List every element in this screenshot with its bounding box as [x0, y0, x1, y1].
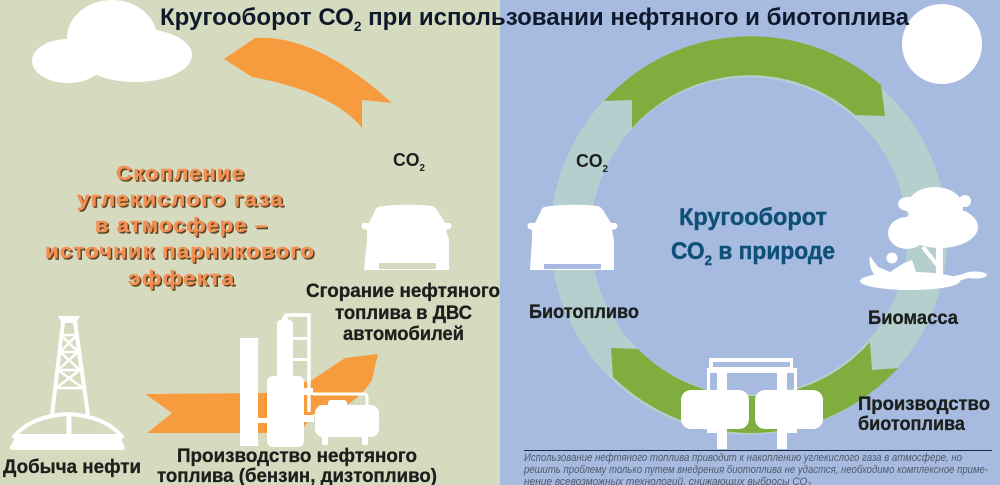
label: biofuel production — [858, 393, 990, 435]
icon: tree biomass — [860, 187, 987, 290]
label: biomass: Биомасса — [868, 307, 958, 329]
arrow: orange production to car — [145, 354, 378, 433]
icon: biofuel plant — [681, 358, 823, 449]
heading: greenhouse effect callout: источник парникового — [45, 240, 315, 263]
heading: greenhouse effect callout: эффекта — [130, 268, 236, 292]
icon: car right — [528, 205, 618, 270]
label: CO2 left: CO — [393, 150, 420, 170]
label: CO2 right: 2 — [603, 164, 608, 175]
icon: car left — [362, 205, 452, 270]
title: 2 — [354, 18, 362, 34]
label: oil fuel production: Производство нефтяного — [177, 445, 417, 467]
label: biofuel: Биотопливо — [529, 301, 639, 323]
heading: natural cycle: СО — [671, 238, 706, 265]
panel: biofuel background — [500, 0, 1000, 485]
label: biofuel production: биотоплива — [858, 413, 965, 435]
heading: greenhouse effect callout: эффекта — [128, 267, 235, 290]
arrow: green top — [604, 36, 885, 128]
heading: greenhouse effect callout: Скопление — [116, 162, 245, 185]
chart: CO2 natural cycle ring — [570, 58, 928, 414]
heading: natural cycle: Кругооборот — [679, 204, 827, 231]
label: combustion: автомобилей — [343, 323, 464, 345]
label: combustion: топлива в ДВС — [335, 302, 472, 324]
title: при использовании нефтяного и биотоплива — [361, 4, 909, 31]
icon: oil derrick — [10, 316, 125, 450]
heading: greenhouse effect callout — [45, 162, 316, 292]
heading: greenhouse effect callout: Скопление — [118, 164, 246, 186]
arrow: orange CO2 to atmosphere — [224, 38, 392, 128]
heading: greenhouse effect callout: источник парникового — [46, 242, 316, 264]
arrow: green bottom — [611, 342, 898, 433]
heading: greenhouse effect callout: в атмосфере – — [96, 216, 270, 238]
label: oil fuel production — [157, 445, 437, 485]
label: biofuel production: Производство — [858, 393, 990, 415]
heading: greenhouse effect callout: углекислого газа — [78, 190, 286, 212]
heading: greenhouse effect callout: в атмосфере – — [95, 214, 268, 237]
heading: greenhouse effect callout: углекислого газа — [77, 188, 284, 211]
heading: natural cycle — [671, 204, 835, 268]
label: combustion: Сгорание нефтяного — [306, 280, 500, 302]
heading: natural cycle: в природе — [712, 238, 835, 265]
label: CO2 left: 2 — [420, 163, 425, 174]
icon: sun — [902, 4, 982, 84]
label: CO2 right: CO — [576, 151, 603, 171]
divider line — [524, 450, 992, 451]
icon: cloud — [32, 0, 192, 83]
icon: refinery — [240, 313, 379, 447]
label: combustion — [306, 280, 500, 345]
heading: natural cycle: 2 — [705, 252, 712, 268]
title: Кругооборот СО — [160, 4, 357, 31]
label: oil extraction: Добыча нефти — [3, 456, 141, 478]
panel: oil fuel background — [0, 0, 500, 485]
text block: footnote — [523, 452, 988, 485]
